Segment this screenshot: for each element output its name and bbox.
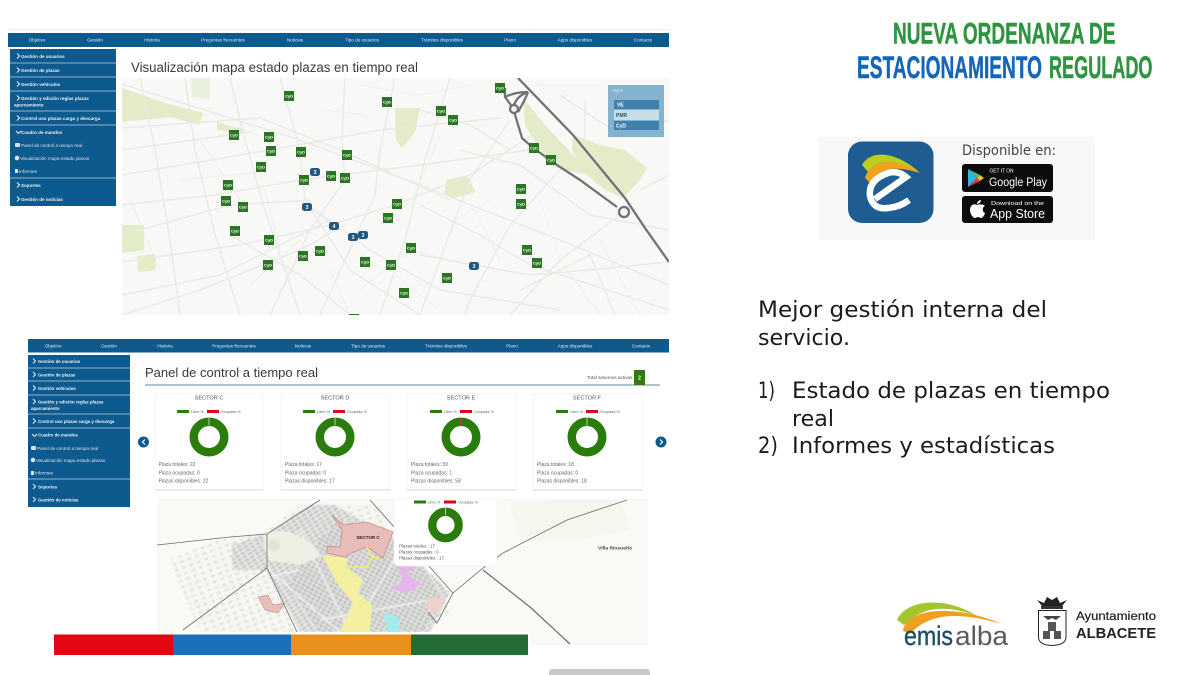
logo: emisalba: alba bbox=[955, 621, 1009, 651]
map layer legend: CyD bbox=[616, 124, 626, 130]
arrow: next bbox=[656, 436, 666, 448]
map layer legend: Tipos bbox=[612, 88, 624, 93]
green parking markers: CyD bbox=[341, 176, 349, 180]
green parking markers: CyD bbox=[496, 86, 504, 90]
card: sector D bbox=[281, 394, 390, 490]
top navigation bar 1: Contacto bbox=[634, 38, 653, 43]
sidebar menu 1 bbox=[10, 49, 116, 206]
grey button fragment bbox=[549, 669, 650, 675]
green parking markers: CyD bbox=[361, 260, 369, 264]
sidebar menu 2 bbox=[28, 355, 130, 507]
sidebar menu 2: Gestión de plazas bbox=[38, 372, 76, 378]
card: sector D: Libre % bbox=[317, 410, 330, 414]
badge: Google Play bbox=[962, 164, 1053, 192]
green parking markers: CyD bbox=[547, 158, 555, 162]
top navigation bar 1 bbox=[8, 33, 669, 47]
card: sector F: Plazas disponibles: 18 bbox=[537, 478, 587, 484]
card: sector C: Plaza totales: 22 bbox=[158, 462, 196, 468]
badge: Google Play: GET IT ON bbox=[990, 168, 1014, 174]
map popup: selected sector: Plazas disponibles : 17 bbox=[399, 556, 444, 560]
top navigation bar 2: Historia bbox=[157, 343, 173, 348]
green parking markers: CyD bbox=[239, 204, 247, 210]
text block: benefits: real bbox=[792, 407, 834, 432]
green parking markers: CyD bbox=[231, 228, 239, 234]
card: sector C bbox=[155, 394, 263, 490]
card: sector E: Plaza ocupadas: 1 bbox=[411, 470, 452, 476]
green parking markers bbox=[221, 83, 556, 318]
sidebar menu 1: Control uso plazas carga y descarga bbox=[21, 116, 101, 121]
heading: map title: Visualización mapa estado plazas en tiempo real bbox=[131, 60, 418, 75]
map popup: selected sector: Plazas totales : 17 bbox=[399, 544, 435, 548]
badge: Google Play: Google Play bbox=[989, 177, 1047, 189]
map layer legend: PMR bbox=[616, 113, 628, 119]
top navigation bar 1: Preguntas frecuentes bbox=[201, 38, 246, 43]
badge: App Store: App Store bbox=[990, 207, 1045, 221]
map popup: selected sector: Libre % bbox=[428, 500, 441, 504]
card: sector E: SECTOR E bbox=[447, 396, 476, 402]
green parking markers: CyD bbox=[517, 186, 525, 192]
green parking markers: CyD bbox=[393, 202, 401, 206]
map parks bbox=[122, 78, 647, 272]
sidebar menu 1: Informes bbox=[19, 169, 38, 174]
panel: app availability bbox=[818, 137, 1095, 240]
blue cluster markers bbox=[302, 168, 479, 270]
sidebar menu 1: Gestión vehículos bbox=[21, 82, 61, 87]
top navigation bar 1: Plano bbox=[504, 38, 516, 43]
map popup: selected sector: Ocupada % bbox=[458, 500, 478, 504]
card: sector C: SECTOR C bbox=[195, 396, 223, 402]
top navigation bar 2: Gestión bbox=[101, 343, 117, 348]
heading: control panel title: Panel de control a tiempo real bbox=[145, 365, 318, 380]
icon: crown and shield bbox=[1037, 597, 1067, 646]
card: sector F bbox=[533, 394, 642, 490]
green parking markers: CyD bbox=[257, 164, 265, 170]
map layer legend: VE bbox=[617, 102, 624, 108]
green parking markers: CyD bbox=[533, 260, 541, 266]
panel: real-time control dashboard screenshot bbox=[28, 339, 669, 645]
card: sector C: Libre % bbox=[191, 410, 204, 414]
map ring road bbox=[505, 78, 669, 262]
green parking markers: CyD bbox=[267, 148, 275, 154]
top navigation bar 2 bbox=[28, 339, 669, 352]
green parking markers: CyD bbox=[530, 146, 538, 150]
top navigation bar 2: Preguntas frecuentes bbox=[212, 343, 257, 348]
main roads bbox=[157, 500, 627, 644]
top navigation bar 1: Noticias bbox=[287, 38, 304, 43]
green parking markers: CyD bbox=[387, 262, 395, 268]
card: sector F: Plaza totales: 18 bbox=[537, 462, 574, 468]
sidebar menu 2: Gestión de noticias bbox=[38, 498, 79, 502]
logo: emisalba bbox=[897, 602, 1009, 651]
sidebar menu 2: Gestión y edición reglas plazas bbox=[38, 400, 104, 404]
blue cluster markers: 3 bbox=[473, 264, 476, 270]
card: sector D: Plaza ocupadas: 0 bbox=[285, 470, 326, 476]
top navigation bar 1: Objetivo bbox=[29, 38, 46, 43]
card: sector C: Ocupada % bbox=[221, 410, 241, 414]
sidebar menu 1: Panel de control a tiempo real bbox=[21, 143, 82, 148]
text block: benefits bbox=[758, 298, 1110, 459]
panel: map dashboard screenshot bbox=[8, 29, 669, 318]
green parking markers: CyD bbox=[407, 246, 415, 250]
green parking markers: CyD bbox=[285, 94, 293, 98]
blue cluster markers: 4 bbox=[333, 224, 336, 230]
map: city parking status bbox=[122, 78, 669, 318]
card: sector D: Ocupada % bbox=[347, 410, 367, 414]
colour bar bbox=[54, 632, 530, 657]
card: sector F: Plaza ocupadas: 0 bbox=[537, 470, 578, 476]
card: sector E: Libre % bbox=[444, 410, 457, 414]
card: sector D: Plazas disponibles: 17 bbox=[285, 478, 335, 484]
green parking markers: CyD bbox=[343, 152, 351, 158]
top navigation bar 2: Noticias bbox=[295, 343, 312, 348]
text block: benefits: Informes y estadísticas bbox=[792, 434, 1055, 459]
logo: emisalba: emis bbox=[904, 621, 953, 651]
top navigation bar 1: Trámites disponibles bbox=[421, 38, 464, 43]
top navigation bar 1: Apps disponibles bbox=[558, 38, 593, 43]
map: sectors overview bbox=[157, 499, 648, 645]
sidebar menu 2: Informes bbox=[35, 470, 54, 476]
sidebar menu 1: Cuadro de mandos bbox=[21, 130, 63, 135]
card: sector E: Plaza totales: 59 bbox=[411, 462, 448, 468]
sector zones bbox=[258, 515, 445, 632]
sidebar menu 2: Gestión de usuarios bbox=[38, 359, 81, 364]
active sessions counter: Total sesiones activas bbox=[587, 375, 633, 380]
arrow: previous bbox=[138, 436, 149, 448]
green parking markers: CyD bbox=[297, 150, 305, 154]
green parking markers: CyD bbox=[265, 238, 273, 242]
sidebar menu 1: Gestión de plazas bbox=[21, 68, 60, 73]
top navigation bar 2: Contacto bbox=[632, 343, 651, 348]
card: sector D: SECTOR D bbox=[321, 396, 349, 402]
map popup: selected sector bbox=[394, 499, 497, 566]
green parking markers: CyD bbox=[443, 276, 451, 280]
sidebar menu 1: Visualización mapa estado plazas bbox=[20, 156, 90, 161]
card: sector C: Plazas disponibles: 22 bbox=[158, 478, 208, 484]
green parking markers: CyD bbox=[384, 216, 392, 220]
card: sector C: Plaza ocupadas: 0 bbox=[158, 470, 200, 476]
top navigation bar 2: Trámites disponibles bbox=[425, 343, 468, 348]
green parking markers: CyD bbox=[449, 118, 457, 122]
title bbox=[857, 18, 1152, 85]
logo: Ayuntamiento de Albacete: Ayuntamiento bbox=[1076, 611, 1156, 623]
top navigation bar 2: Apps disponibles bbox=[558, 343, 593, 348]
sidebar menu 2: Panel de control a tiempo real bbox=[37, 446, 98, 451]
top navigation bar 2: Plano bbox=[506, 343, 518, 348]
active sessions counter: 2 bbox=[638, 376, 641, 382]
title: ESTACIONAMIENTO bbox=[857, 49, 1042, 85]
green parking markers: CyD bbox=[517, 202, 525, 206]
green parking markers: CyD bbox=[383, 100, 391, 104]
green parking markers: CyD bbox=[327, 174, 335, 178]
card: sector F: SECTOR F bbox=[573, 396, 602, 402]
text block: benefits: 1) bbox=[758, 379, 775, 404]
blue cluster markers: 3 bbox=[352, 235, 355, 241]
map streets bbox=[122, 78, 669, 315]
blue cluster markers: 3 bbox=[362, 233, 365, 239]
blue cluster markers: 3 bbox=[314, 170, 317, 176]
text block: benefits: servicio. bbox=[758, 326, 850, 351]
blue cluster markers: 3 bbox=[306, 205, 309, 211]
sidebar menu 2: aparcamiento bbox=[31, 406, 60, 411]
top navigation bar 1: Historia bbox=[144, 38, 160, 43]
icon: app logo bbox=[848, 142, 934, 223]
green parking markers: CyD bbox=[299, 254, 307, 258]
badge: App Store: Download on the bbox=[991, 201, 1044, 207]
green parking markers: CyD bbox=[224, 182, 232, 188]
top navigation bar 1: Gestión bbox=[87, 38, 103, 43]
card: sector F: Libre % bbox=[570, 410, 583, 414]
text block: benefits: Mejor gestión interna del bbox=[758, 298, 1047, 323]
green parking markers: CyD bbox=[437, 108, 445, 114]
map: sectors overview: Villa Riosueño bbox=[598, 546, 632, 550]
active sessions counter bbox=[587, 370, 645, 385]
green parking markers: CyD bbox=[222, 198, 230, 204]
green parking markers: CyD bbox=[264, 262, 272, 268]
card: sector E: Ocupada % bbox=[474, 410, 494, 414]
sidebar menu 1: aparcamiento bbox=[14, 102, 44, 108]
sidebar menu 2: Control uso plazas carga y descarga bbox=[38, 419, 115, 424]
badge: App Store bbox=[962, 196, 1053, 223]
green parking markers: CyD bbox=[300, 178, 308, 182]
map urban fabric bbox=[171, 504, 450, 632]
card: sector E: Plazas disponibles: 58 bbox=[411, 478, 461, 484]
green parking markers: CyD bbox=[400, 290, 408, 296]
text block: benefits: 2) bbox=[758, 434, 778, 459]
logo: Ayuntamiento de Albacete: ALBACETE bbox=[1076, 626, 1156, 642]
map popup: selected sector: Plazas ocupadas : 0 bbox=[399, 550, 439, 554]
sidebar menu 2: Visualización mapa estado plazas bbox=[36, 458, 106, 463]
green parking markers: CyD bbox=[523, 248, 531, 252]
sidebar menu 2: Gestión vehículos bbox=[38, 386, 76, 391]
sidebar menu 1: Gestión de noticias bbox=[21, 197, 63, 202]
text: available on: Disponible en: bbox=[962, 143, 1056, 159]
logo: Ayuntamiento de Albacete bbox=[1037, 597, 1156, 646]
sidebar menu 1: Gestión y edición reglas plazas bbox=[21, 96, 89, 101]
card: sector D: Plaza totales: 17 bbox=[285, 462, 322, 468]
sidebar menu 1: Soportes bbox=[21, 183, 41, 188]
sidebar menu 1: Gestión de usuarios bbox=[21, 54, 65, 59]
green parking markers: CyD bbox=[265, 134, 273, 140]
green parking markers: CyD bbox=[230, 132, 238, 138]
green parking markers: CyD bbox=[316, 248, 324, 254]
sidebar menu 2: Soportes bbox=[38, 484, 58, 490]
map layer legend bbox=[608, 85, 664, 137]
place labels: SECTOR C bbox=[356, 535, 380, 540]
text block: benefits: Estado de plazas en tiempo bbox=[792, 379, 1110, 404]
top navigation bar 2: Tipo de usuarios bbox=[351, 343, 386, 348]
top navigation bar 1: Tipo de usuarios bbox=[345, 38, 380, 43]
sidebar menu 2: Cuadro de mandos bbox=[38, 432, 78, 438]
top navigation bar 2: Objetivo bbox=[45, 343, 62, 348]
card: sector E bbox=[407, 394, 516, 490]
card: sector F: Ocupada % bbox=[600, 410, 620, 414]
